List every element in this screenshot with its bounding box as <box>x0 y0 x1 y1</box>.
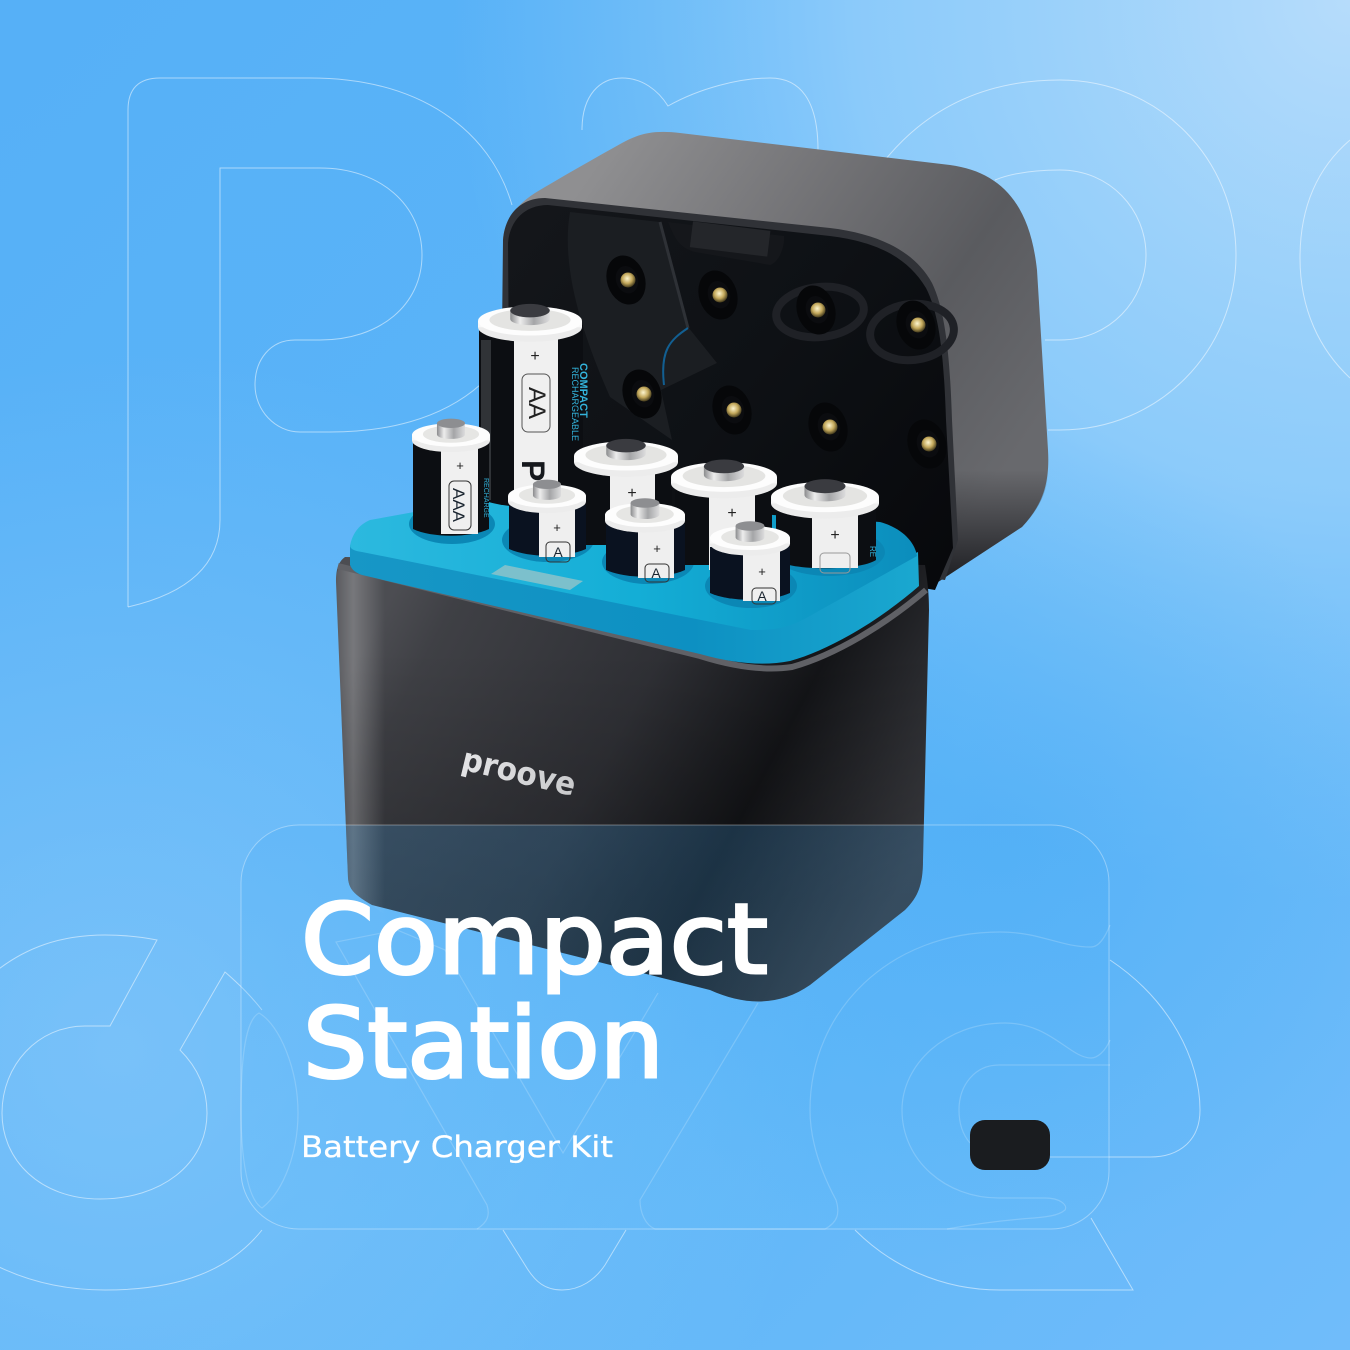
battery: AAA front centre: A <box>651 565 661 581</box>
battery: tall AA <box>478 304 589 507</box>
tray top <box>350 497 917 630</box>
battery: tall AA: + <box>530 348 540 365</box>
battery: AAA front left <box>508 480 586 562</box>
battery: AAA left: + <box>456 458 464 473</box>
battery: tall AA: RECHARGEABLE <box>570 367 580 441</box>
battery: AA short right <box>771 479 879 573</box>
battery: AAA front left: A <box>553 544 563 560</box>
battery: tall AA: P <box>515 460 551 481</box>
battery: AAA front centre <box>605 498 685 582</box>
title <box>301 883 768 1100</box>
battery: AA short rear: + <box>627 485 637 502</box>
battery: AAA front right <box>710 521 790 604</box>
contact pins <box>600 250 957 474</box>
lid interior <box>508 205 953 590</box>
base body <box>336 557 929 1001</box>
battery: AAA left: RECHARGE <box>482 478 489 518</box>
moulded ridge with blue reflection <box>660 222 688 385</box>
battery: AA short rear <box>574 439 678 545</box>
battery: AAA left: AAA <box>449 488 468 523</box>
interior moulded panel <box>568 212 717 440</box>
open lid <box>500 132 1048 590</box>
base rim highlight <box>338 566 926 669</box>
battery: AAA front right: A <box>757 588 767 604</box>
teal battery tray <box>350 497 919 664</box>
lid rim <box>500 198 958 580</box>
title: Station <box>303 987 664 1100</box>
battery wells <box>409 504 885 608</box>
battery: AAA left <box>412 419 490 536</box>
tray side <box>350 540 919 664</box>
frosted glass card <box>241 825 1109 1229</box>
product: battery charger station <box>336 132 1048 1001</box>
battery: AA short right: RE <box>868 546 877 557</box>
battery: tall AA: AA <box>523 387 550 419</box>
subtitle: Battery Charger Kit <box>301 1130 613 1164</box>
battery: tall AA: COMPACT <box>577 363 589 418</box>
display window <box>491 565 583 590</box>
brand logo on base: proove <box>458 740 580 804</box>
title: Compact <box>301 883 768 996</box>
black rounded badge <box>970 1120 1050 1170</box>
outlined letters seen through the glass card <box>241 925 1110 1229</box>
hinge latch <box>668 221 784 265</box>
battery: AAA front left: + <box>553 520 561 535</box>
battery: AA short middle <box>671 460 777 570</box>
lid outer shell <box>503 132 1048 584</box>
battery: AA short middle: + <box>727 505 737 522</box>
battery: AA short right: + <box>830 527 840 544</box>
lid shaded lower corner <box>925 470 1048 584</box>
battery: AAA front centre: + <box>653 541 661 556</box>
battery: AAA front right: + <box>758 564 766 579</box>
